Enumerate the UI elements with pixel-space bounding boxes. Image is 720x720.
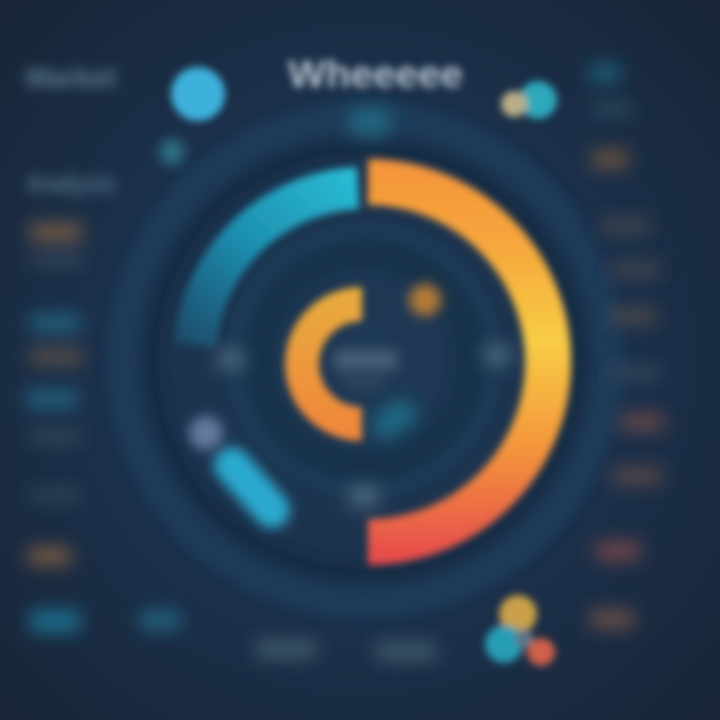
- left subheading: Analysis: [26, 168, 116, 198]
- small orange marker: [409, 284, 441, 316]
- donut chart: orange arc: [368, 182, 548, 542]
- top left heading: Market: [26, 62, 116, 93]
- icon: bottom right cluster: [485, 595, 555, 666]
- right column labels: [590, 64, 664, 628]
- icon: blue circle: [171, 67, 225, 121]
- icon: small dot: [159, 139, 185, 165]
- inner side labels: [218, 346, 510, 506]
- left column labels: [26, 224, 180, 632]
- teal capsule segment: [232, 465, 272, 510]
- title: Wheeeee: [288, 54, 463, 96]
- capsule cap dot: [189, 416, 223, 450]
- donut chart: inner orange arc: [302, 304, 362, 424]
- donut chart: inner teal arc: [375, 405, 410, 428]
- outer dial rings: [122, 117, 608, 603]
- top centre dial accent: [350, 108, 390, 136]
- donut chart: teal arc: [195, 188, 358, 345]
- icon: top right badge: [501, 81, 557, 119]
- bottom labels: [256, 640, 436, 660]
- centre label: [335, 350, 397, 386]
